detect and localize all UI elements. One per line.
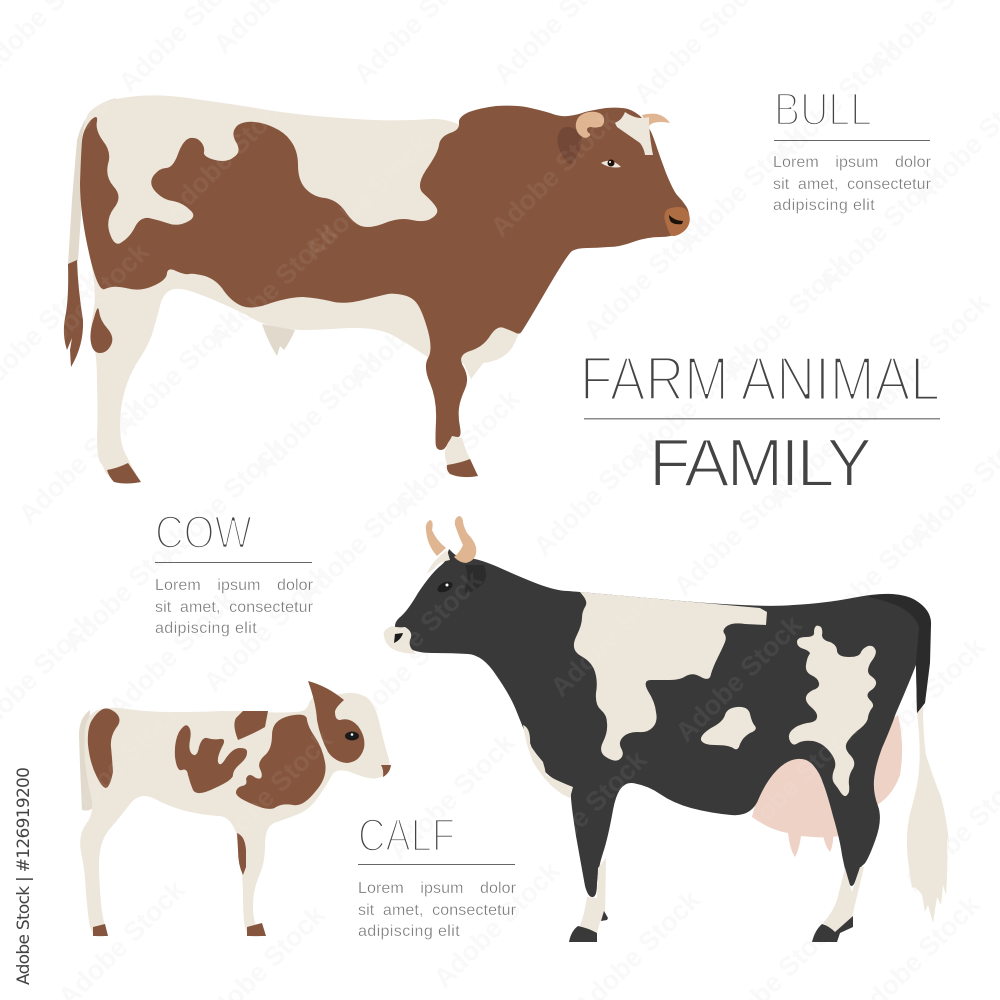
background watermark pattern: Adobe Stock — [763, 375, 901, 514]
title: farm animal: FARM ANIMAL — [580, 345, 940, 414]
calf tail — [79, 710, 95, 810]
cow head cream patch — [427, 550, 450, 574]
calf front hoof — [247, 923, 266, 936]
cow tail — [907, 703, 949, 923]
cow left horn — [426, 520, 446, 556]
cow far udder — [860, 715, 902, 805]
calf rear hoof — [93, 924, 108, 936]
background watermark pattern: Adobe Stock — [203, 215, 341, 354]
background watermark pattern: Adobe Stock — [858, 287, 996, 426]
watermark overlay on animals: Adobe Stock — [670, 609, 808, 748]
calf description: sit amet, consectetur — [358, 902, 517, 919]
watermark overlay on animals: Adobe Stock — [50, 694, 188, 833]
background watermark pattern: Adobe Stock — [813, 159, 951, 298]
calf description: adipiscing elit — [358, 923, 460, 940]
watermark overlay on animals: Adobe Stock — [515, 744, 653, 883]
bull near horn — [576, 112, 604, 138]
watermark overlay on animals: Adobe Stock — [350, 564, 488, 703]
label block: cow — [155, 506, 314, 637]
background watermark pattern: Adobe Stock — [108, 303, 246, 442]
cow rule — [155, 562, 312, 563]
background watermark pattern: Adobe Stock — [578, 207, 716, 346]
bull tail tuft — [64, 260, 83, 367]
calf shoulder patch — [236, 715, 326, 809]
background watermark pattern: Adobe Stock — [768, 31, 906, 170]
bull front hoof — [447, 459, 478, 477]
bull rear hoof — [107, 463, 141, 484]
cow nostril — [394, 633, 403, 643]
cow chest cream patch — [523, 725, 573, 798]
calf rump patch — [88, 708, 120, 788]
bull rule — [774, 140, 930, 141]
calf middle patch — [175, 725, 247, 793]
title divider — [584, 418, 940, 420]
background watermark pattern: Adobe Stock — [198, 559, 336, 698]
cow small flank patch — [701, 707, 756, 749]
bull description: sit amet, consectetur — [773, 176, 932, 193]
watermark overlay on animals: Adobe Stock — [725, 714, 863, 853]
bull nostril — [669, 215, 683, 224]
watermark overlay on animals: Adobe Stock — [18, 47, 156, 186]
calf top patch — [234, 711, 268, 740]
cow shoulder cream patch — [574, 592, 767, 761]
bull tail root — [68, 98, 117, 265]
cow front hoof — [569, 926, 597, 942]
watermark overlay on animals: Adobe Stock — [545, 564, 683, 703]
watermark overlay on animals: Adobe Stock — [158, 87, 296, 226]
watermark overlay on animals: Adobe Stock — [485, 104, 623, 243]
cow ear — [465, 565, 486, 593]
calf leg patch — [237, 833, 246, 875]
calf eye — [345, 732, 359, 740]
background watermark pattern: Adobe Stock — [673, 119, 811, 258]
watermark overlay on animals: Adobe Stock — [17, 236, 155, 375]
background watermark pattern: Adobe Stock — [668, 463, 806, 602]
cow shading over rump — [867, 594, 931, 713]
background watermark pattern: Adobe Stock — [13, 391, 151, 530]
stock id credit: Adobe Stock | #126919200 — [14, 767, 34, 985]
bull chest spike — [460, 356, 484, 379]
cow description — [155, 577, 314, 637]
background watermark pattern: Adobe Stock — [428, 855, 566, 994]
watermark overlay on animals: Adobe Stock — [205, 217, 343, 356]
title: family: FAMILY — [649, 425, 872, 501]
cow description: sit amet, consectetur — [155, 599, 314, 616]
calf description: Lorem ipsum dolor — [358, 880, 517, 897]
bull heading: BULL — [774, 83, 872, 135]
watermark overlay on animals — [17, 47, 863, 883]
cow right horn — [454, 516, 476, 563]
cow dark body — [395, 549, 930, 897]
bull eye — [601, 160, 621, 168]
watermark overlay on animals: Adobe Stock — [200, 724, 338, 863]
calf body — [80, 693, 389, 937]
calf heading: CALF — [358, 809, 455, 861]
label block: calf — [358, 809, 517, 940]
calf ear and face patch — [308, 681, 364, 763]
cow teat — [823, 832, 833, 852]
background watermark pattern: Adobe Stock — [388, 383, 526, 522]
bull ear — [557, 127, 582, 164]
calf nose — [381, 765, 391, 777]
bull hock patch — [90, 308, 112, 353]
cow flank zigzag patch — [789, 626, 876, 796]
cow description: Lorem ipsum dolor — [155, 577, 314, 594]
cow front sock — [580, 858, 606, 933]
bull illustration — [64, 95, 690, 483]
calf illustration — [79, 681, 391, 937]
background watermark pattern: Adobe Stock — [383, 727, 521, 866]
cow near udder — [752, 756, 840, 857]
cow illustration — [384, 516, 949, 942]
cow hind hoof — [812, 916, 853, 942]
cow muzzle — [384, 626, 417, 654]
watermark overlay on animals: Adobe Stock — [298, 127, 436, 266]
cow front back-hoof — [601, 911, 608, 921]
label block: bull — [773, 83, 932, 214]
background watermark pattern: Adobe Stock — [528, 423, 666, 562]
background watermark pattern: Adobe Stock — [718, 247, 856, 386]
background watermark pattern: Adobe Stock — [293, 471, 431, 610]
background watermark pattern: Adobe Stock — [343, 255, 481, 394]
bull main brown coat — [80, 106, 689, 450]
bull nose — [664, 207, 690, 236]
bull description — [773, 154, 932, 214]
background watermark pattern: Adobe Stock — [338, 599, 476, 738]
background watermark pattern: Adobe Stock — [58, 519, 196, 658]
background watermark pattern: Adobe Stock — [248, 343, 386, 482]
cow hind sock — [823, 867, 864, 933]
bull far horn — [642, 114, 670, 128]
bull forehead patch — [615, 112, 653, 155]
bull front fetlock — [445, 436, 472, 466]
bull description: Lorem ipsum dolor — [773, 154, 932, 171]
background watermark pattern: Adobe Stock — [153, 431, 291, 570]
background watermark pattern: Adobe Stock — [623, 335, 761, 474]
bull brisket hair — [262, 324, 295, 356]
calf description — [358, 880, 517, 940]
cow description: adipiscing elit — [155, 620, 257, 637]
background watermark pattern: Adobe Stock — [63, 175, 201, 314]
cow eye — [436, 580, 454, 594]
calf rule — [358, 864, 515, 865]
cow heading: COW — [155, 506, 252, 558]
background watermark pattern: Adobe Stock — [103, 584, 241, 723]
background watermark pattern: Adobe Stock — [853, 631, 991, 770]
background watermark pattern: Adobe Stock — [808, 503, 946, 642]
bull body base — [80, 95, 546, 480]
bull description: adipiscing elit — [773, 197, 875, 214]
